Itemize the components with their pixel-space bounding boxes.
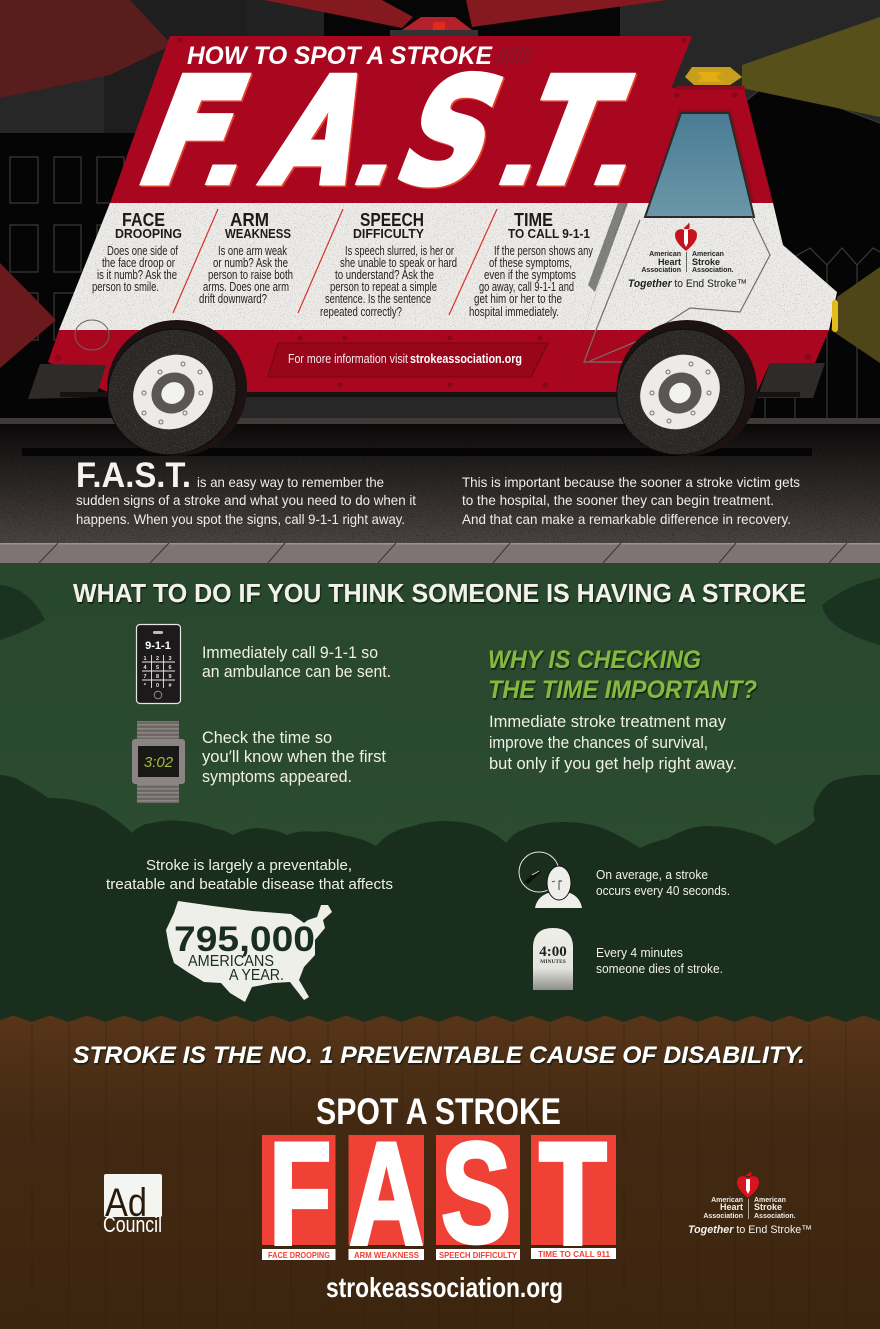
every 4 minutes text	[596, 945, 723, 976]
light beams	[0, 0, 880, 368]
big F.A.S.T. lettering: F	[119, 48, 269, 217]
logo on cab: American Heart / Stroke Association: Together to End Stroke™	[628, 278, 747, 290]
logo on cab: American Heart / Stroke Association: Heart	[658, 257, 681, 267]
column: arm weakness: Is one arm weak	[218, 244, 288, 258]
intro text: why it matters: And that can make a remarkable difference in recovery.	[462, 511, 791, 527]
step text: check the time	[202, 729, 386, 786]
logo on cab: American Heart / Stroke Association: Association	[641, 267, 681, 274]
icon: phone with 9-1-1: 4	[143, 665, 147, 671]
American Heart and Stroke Association logo: Heart	[720, 1202, 743, 1212]
column: arm weakness	[199, 210, 293, 306]
sidewalk	[0, 543, 880, 563]
FAST logo blocks: FACE DROOPING	[268, 1250, 330, 1260]
dividers between FAST columns	[173, 209, 497, 315]
website plate on truck: For more information visit	[288, 352, 408, 366]
icon: person and clock face	[519, 852, 582, 908]
step text: call 9-1-1	[202, 644, 391, 681]
column: face drooping: person to smile.	[92, 280, 159, 294]
column: arm weakness: drift downward?	[199, 292, 267, 306]
USA map with 795,000 Americans a year: A YEAR.	[229, 967, 284, 984]
column: face drooping: Does one side of	[107, 244, 178, 258]
average stroke text: occurs every 40 seconds.	[596, 883, 730, 898]
FAST logo blocks: ARM WEAKNESS	[354, 1250, 419, 1260]
column: time to call: TO CALL 9-1-1	[508, 226, 590, 241]
big F.A.S.T. lettering: .	[483, 102, 563, 204]
logo on cab: American Heart / Stroke Association: Stroke	[692, 257, 720, 267]
FAST logo blocks: F	[269, 1112, 331, 1275]
speckle on white panels	[50, 203, 850, 333]
heading: why is checking the time important: THE TIME IMPORTANT?	[488, 676, 757, 704]
wooden fence section	[0, 1016, 880, 1329]
truck heading: how to spot a stroke: HOW TO SPOT A STROKE	[187, 42, 493, 70]
column: arm weakness: arms. Does one arm	[203, 280, 289, 294]
FAST logo blocks: S	[441, 1112, 511, 1273]
American Heart and Stroke Association logo: Association	[703, 1213, 743, 1220]
disability statement: STROKE IS THE NO. 1 PREVENTABLE CAUSE OF DISABILITY.	[73, 1042, 805, 1069]
big F.A.S.T. lettering: T	[498, 48, 644, 217]
column: speech difficulty: SPEECH	[360, 210, 424, 230]
logo on cab: American Heart / Stroke Association: American	[692, 251, 724, 258]
step text: call 9-1-1: Immediately call 9-1-1 so	[202, 644, 378, 662]
column: face drooping: the face droop or	[102, 256, 175, 270]
step text: check the time: Check the time so	[202, 729, 332, 747]
explanation text	[489, 713, 737, 773]
intro text: F.A.S.T. explanation	[76, 456, 416, 527]
every 4 minutes text: Every 4 minutes	[596, 945, 683, 960]
step text: call 9-1-1: an ambulance can be sent.	[202, 663, 391, 681]
big F.A.S.T. lettering: .	[189, 102, 269, 204]
FAST logo blocks: T	[539, 1113, 607, 1276]
website url: strokeassociation.org	[326, 1272, 563, 1303]
column: speech difficulty: sentence. Is the sentence	[325, 292, 431, 306]
spot a stroke heading: SPOT A STROKE	[316, 1091, 561, 1132]
icon: phone with 9-1-1: 2	[156, 656, 159, 662]
American Heart and Stroke Association logo: Together to End Stroke™	[688, 1224, 812, 1236]
USA map with 795,000 Americans a year	[166, 901, 332, 1002]
intro text: F.A.S.T. explanation: F.A.S.T.	[76, 456, 191, 495]
big F.A.S.T. lettering: .	[339, 102, 419, 204]
stroke statistic text	[106, 857, 393, 893]
logo on cab: American Heart / Stroke Association: American	[649, 251, 681, 258]
icon: tombstone 4:00 minutes: 4:00	[539, 944, 567, 960]
icon: phone with 9-1-1: 0	[156, 683, 159, 689]
icon: phone with 9-1-1: 5	[156, 665, 159, 671]
stroke statistic text: Stroke is largely a preventable,	[146, 857, 352, 874]
ambulance truck	[28, 17, 850, 478]
icon: wrist watch showing 3:02: 3:02	[144, 754, 174, 771]
intro text: F.A.S.T. explanation: is an easy way to remember the	[197, 474, 384, 490]
siren	[390, 17, 478, 36]
FAST logo blocks: A	[349, 1111, 424, 1275]
column: arm weakness: person to raise both	[208, 268, 293, 282]
column: arm weakness: ARM	[230, 210, 269, 230]
intro text: F.A.S.T. explanation: sudden signs of a stroke and what you need to do when it	[76, 492, 416, 508]
explanation text: improve the chances of survival,	[489, 734, 708, 752]
column: speech difficulty: Is speech slurred, is her or	[345, 244, 454, 258]
USA map with 795,000 Americans a year: 795,000	[174, 920, 315, 959]
intro text: F.A.S.T. explanation: happens. When you spot the signs, call 9-1-1 right away.	[76, 511, 405, 527]
Ad Council logo: Ad	[105, 1181, 147, 1225]
step text: check the time: symptoms appeared.	[202, 768, 352, 786]
curb and road	[0, 418, 880, 543]
section heading: WHAT TO DO IF YOU THINK SOMEONE IS HAVING A STROKE	[73, 578, 806, 608]
website plate on truck	[268, 343, 548, 377]
column: speech difficulty: repeated correctly?	[320, 305, 402, 319]
logo on cab: American Heart / Stroke Association: Association.	[692, 267, 734, 274]
step text: check the time: you′ll know when the first	[202, 748, 386, 766]
intro text: why it matters: This is important because the sooner a stroke victim gets	[462, 474, 800, 490]
USA map with 795,000 Americans a year: AMERICANS	[188, 953, 274, 970]
Ad Council logo	[103, 1174, 162, 1237]
column: face drooping: FACE	[122, 210, 165, 230]
intro text: why it matters	[462, 474, 800, 527]
icon: phone with 9-1-1: 1	[143, 656, 147, 662]
icon: tombstone 4:00 minutes	[533, 928, 573, 990]
column: time to call: TIME	[514, 210, 553, 230]
average stroke text	[596, 867, 730, 898]
American Heart and Stroke Association logo: American	[754, 1197, 786, 1204]
cab	[556, 67, 838, 392]
icon: phone with 9-1-1: 7	[143, 674, 147, 680]
website plate on truck: strokeassociation.org	[410, 352, 522, 366]
American Heart and Stroke Association logo: Stroke	[754, 1202, 782, 1212]
icon: phone with 9-1-1: 9-1-1	[145, 640, 171, 652]
American Heart and Stroke Association logo: Association.	[754, 1213, 796, 1220]
column: speech difficulty: to understand? Ask the	[335, 268, 434, 282]
big F.A.S.T. lettering: .	[578, 102, 658, 204]
icon: phone with 9-1-1: 8	[156, 674, 159, 680]
stroke statistic text: treatable and beatable disease that affects	[106, 876, 393, 893]
column: time to call: of these symptoms,	[489, 256, 572, 270]
heading: why is checking the time important: WHY IS CHECKING	[488, 646, 701, 674]
icon: phone with 9-1-1: 9	[168, 674, 172, 680]
heading: why is checking the time important	[488, 646, 757, 704]
rivets	[56, 38, 810, 387]
logo on cab: American Heart / Stroke Association	[628, 222, 747, 290]
box body	[28, 36, 825, 399]
column: time to call: hospital immediately.	[469, 305, 559, 319]
column: speech difficulty: she unable to speak or hard	[340, 256, 457, 270]
night street background	[0, 0, 880, 420]
column: arm weakness: or numb? Ask the	[213, 256, 288, 270]
column: time to call: If the person shows any	[494, 244, 594, 258]
intro text: why it matters: to the hospital, the sooner they can begin treatment.	[462, 492, 774, 508]
column: speech difficulty: person to repeat a simple	[330, 280, 437, 294]
American Heart and Stroke Association logo: American	[711, 1197, 743, 1204]
average stroke text: On average, a stroke	[596, 867, 708, 882]
column: time to call	[469, 210, 594, 319]
FAST logo blocks	[262, 1111, 616, 1276]
column: time to call: go away, call 9-1-1 and	[479, 280, 574, 294]
icon: phone with 9-1-1: *	[144, 683, 147, 689]
Ad Council logo: Council	[103, 1212, 162, 1237]
green park section with hills	[0, 563, 880, 1030]
icon: phone with 9-1-1: 6	[168, 665, 172, 671]
column: face drooping: is it numb? Ask the	[97, 268, 177, 282]
explanation text: but only if you get help right away.	[489, 755, 737, 773]
icon: phone with 9-1-1: #	[168, 683, 172, 689]
column: time to call: get him or her to the	[474, 292, 562, 306]
FAST logo blocks: TIME TO CALL 911	[538, 1249, 610, 1259]
big F.A.S.T. lettering: A	[247, 48, 394, 217]
column: face drooping: DROOPING	[115, 226, 182, 241]
icon: phone with 9-1-1	[136, 624, 180, 704]
FAST logo blocks: SPEECH DIFFICULTY	[439, 1250, 517, 1260]
column: arm weakness: WEAKNESS	[225, 226, 291, 241]
icon: phone with 9-1-1: 3	[168, 656, 172, 662]
American Heart and Stroke Association logo	[688, 1171, 812, 1236]
icon: tombstone 4:00 minutes: MINUTES	[540, 959, 566, 965]
rear wheel	[107, 320, 247, 456]
column: face drooping	[92, 210, 182, 294]
column: time to call: even if the symptoms	[484, 268, 576, 282]
column: speech difficulty	[320, 210, 457, 319]
icon: wrist watch showing 3:02	[132, 721, 185, 803]
column: speech difficulty: DIFFICULTY	[353, 226, 424, 241]
front wheel	[616, 320, 757, 456]
big F.A.S.T. lettering: S	[377, 48, 526, 217]
explanation text: Immediate stroke treatment may	[489, 713, 727, 731]
every 4 minutes text: someone dies of stroke.	[596, 961, 723, 976]
big F.A.S.T. lettering	[119, 48, 658, 217]
